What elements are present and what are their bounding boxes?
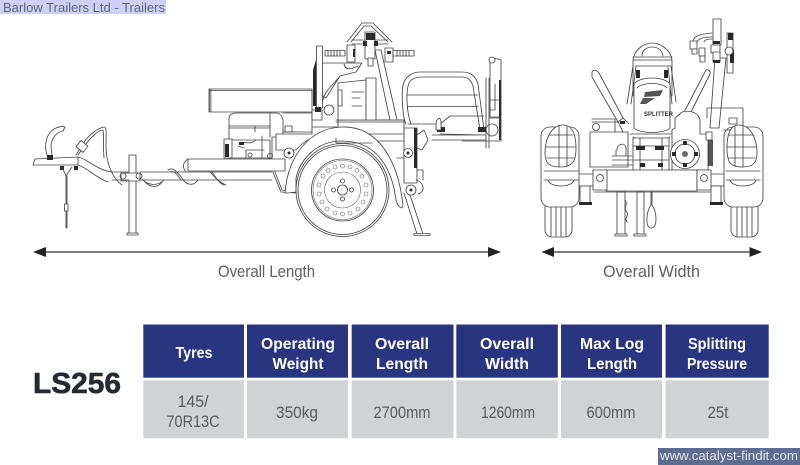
hitch and coupling bbox=[33, 127, 122, 228]
model name: LS256 bbox=[33, 368, 121, 400]
central frame and splitter column bbox=[276, 46, 404, 150]
top valve block and handles bbox=[325, 23, 414, 66]
column: overall length: Overall bbox=[375, 336, 429, 353]
column: overall length: 2700mm bbox=[374, 403, 430, 422]
hydraulic valve mast bbox=[690, 19, 734, 128]
front view trailer drawing bbox=[541, 19, 763, 237]
column: splitting pressure: Splitting bbox=[688, 336, 746, 353]
column: operating weight: Weight bbox=[272, 356, 324, 373]
column: overall width: Overall bbox=[480, 336, 534, 353]
column: max log length: Length bbox=[587, 356, 637, 373]
column: splitting pressure bbox=[666, 324, 769, 438]
column: tyres: Tyres bbox=[176, 345, 213, 362]
column: overall length: Length bbox=[376, 356, 428, 373]
tank bbox=[209, 89, 312, 112]
column: tyres: 145/ bbox=[178, 392, 209, 411]
mudguard bbox=[285, 127, 403, 208]
column: overall width bbox=[456, 324, 558, 438]
log cradle guard bbox=[402, 72, 484, 130]
left and right mudguards bbox=[541, 127, 763, 207]
engine bbox=[224, 113, 312, 158]
column: splitting pressure: 25t bbox=[708, 403, 729, 422]
overall length label: Overall Length bbox=[218, 262, 315, 281]
drawbar and spiral hoses bbox=[112, 159, 285, 186]
overall length arrow bbox=[33, 247, 501, 257]
column: operating weight: 350kg bbox=[276, 403, 318, 422]
engine, tank and mechanical core bbox=[590, 108, 743, 171]
column: tyres: 70R13C bbox=[166, 412, 220, 431]
angled arms bbox=[592, 70, 710, 124]
column: max log length bbox=[561, 324, 662, 438]
column: overall width: Width bbox=[485, 356, 529, 373]
specification table bbox=[143, 324, 769, 438]
overall width label: Overall Width bbox=[603, 262, 700, 281]
column: tyres bbox=[143, 324, 244, 438]
cradle loop and panel: SPLITTER bbox=[644, 112, 674, 118]
rear plate and support arm bbox=[432, 57, 501, 148]
tail light cages bbox=[545, 125, 757, 167]
column: max log length: Max Log bbox=[580, 336, 644, 353]
wheel bbox=[296, 144, 389, 236]
column: overall width: 1260mm bbox=[481, 403, 535, 422]
column: operating weight bbox=[247, 324, 348, 438]
column: splitting pressure: Pressure bbox=[687, 356, 747, 373]
overall width arrow bbox=[542, 247, 762, 257]
side view trailer drawing bbox=[33, 23, 501, 236]
axle bracket and landing leg bbox=[273, 128, 430, 236]
axle beam and hangers bbox=[579, 170, 724, 205]
column: max log length: 600mm bbox=[586, 403, 636, 422]
jockey wheel stand bbox=[120, 155, 142, 235]
website watermark: www.catalyst-findit.com bbox=[659, 448, 798, 463]
tyres bbox=[545, 200, 758, 237]
column: operating weight: Operating bbox=[261, 336, 335, 353]
cradle loop and panel bbox=[627, 43, 676, 132]
column: overall length bbox=[352, 324, 454, 438]
top-left source label: Barlow Trailers Ltd - Trailers bbox=[3, 1, 165, 15]
jacks and safety cable bbox=[615, 192, 656, 236]
